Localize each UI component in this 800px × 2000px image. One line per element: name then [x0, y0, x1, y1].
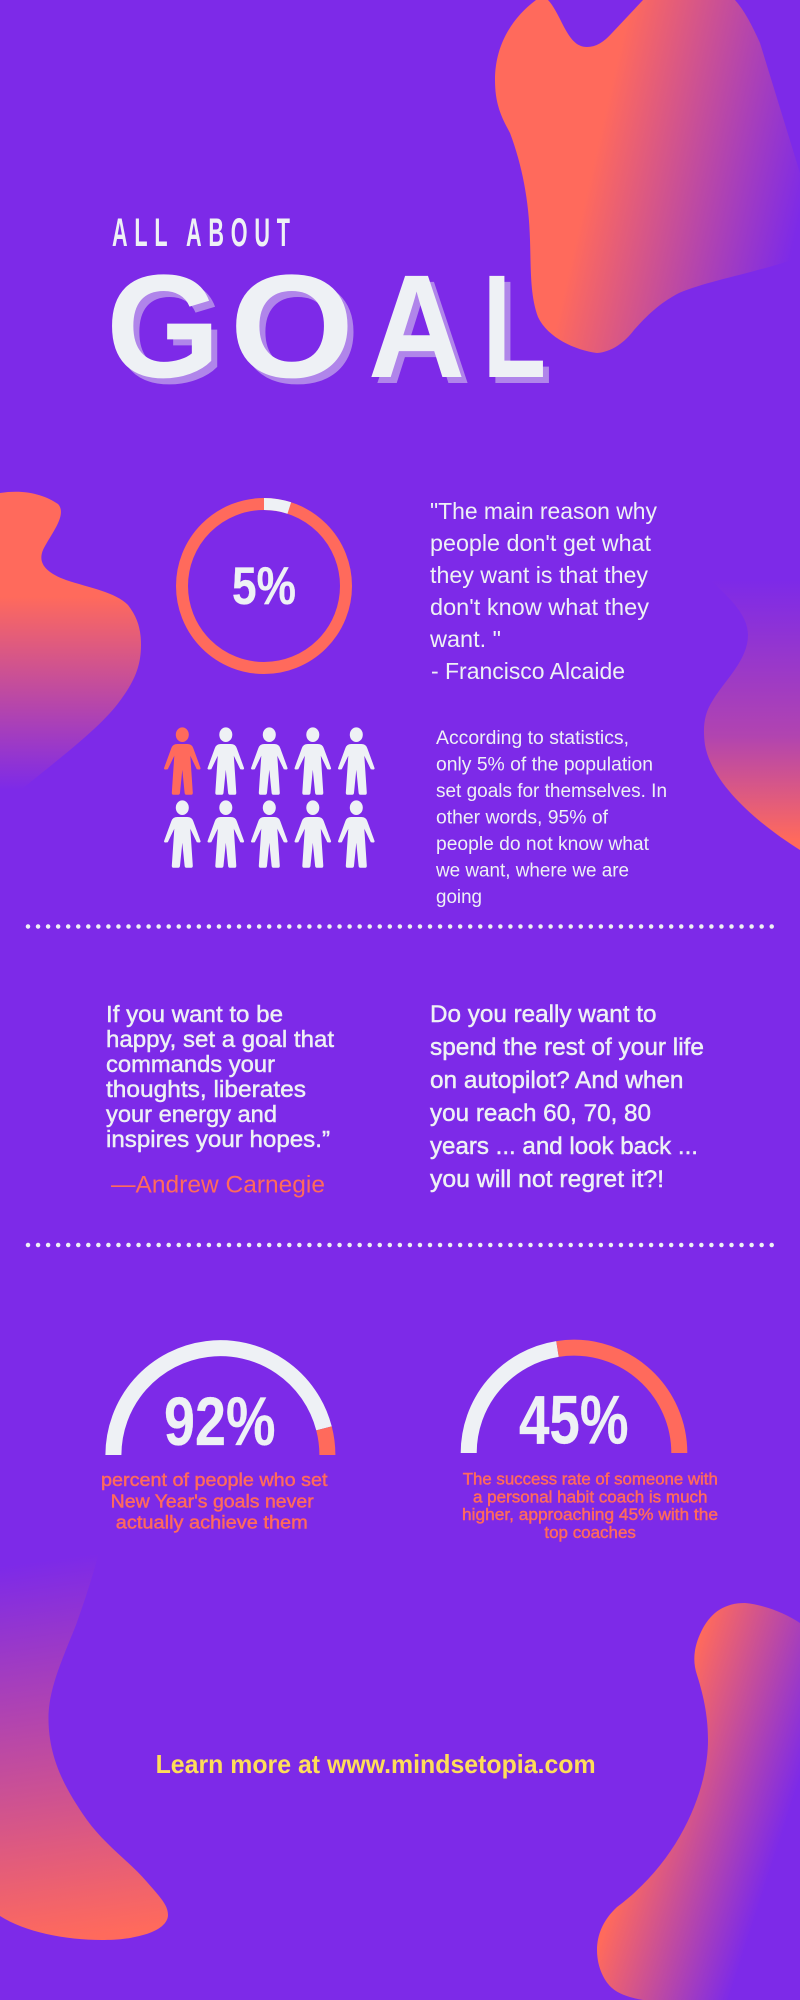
quote: Francisco Alcaide: - Francisco Alcaide: [431, 658, 625, 684]
title: all about: ALL ABOUT: [112, 210, 297, 255]
caption: 45%: top coaches: [544, 1524, 636, 1542]
caption: 45%: [462, 1470, 718, 1542]
caption: 45%: The success rate of someone with: [463, 1470, 718, 1488]
quote: Francisco Alcaide: want. ": [429, 626, 501, 652]
icon: highlighted person: [164, 727, 201, 795]
title: goal: A: [368, 243, 465, 408]
title: goal: O: [230, 244, 354, 409]
quote text: [106, 1001, 335, 1152]
title: goal shadow: [112, 249, 552, 415]
gauge value: 45%: [519, 1382, 628, 1458]
caption: 92%: [101, 1469, 328, 1532]
text: statistics: only 5% of the population: [436, 754, 653, 776]
quote text: If you want to be: [106, 1001, 283, 1027]
title: [106, 210, 552, 415]
quote text: happy, set a goal that: [106, 1026, 335, 1052]
text: autopilot question: years ... and look back ...: [430, 1133, 698, 1160]
quote text: inspires your hopes.”: [106, 1126, 330, 1152]
title: goal: [106, 243, 546, 409]
caption: 92%: actually achieve them: [116, 1511, 308, 1532]
text: statistics: people do not know what: [436, 834, 650, 855]
text: statistics: [435, 728, 667, 908]
title: goal: G: [106, 245, 220, 409]
title: goal: L: [482, 246, 546, 409]
caption: 45%: higher, approaching 45% with the: [462, 1506, 718, 1524]
quote attribution: —Andrew Carnegie: [111, 1172, 325, 1198]
quote text: commands your: [106, 1051, 275, 1077]
quote text: thoughts, liberates: [106, 1076, 306, 1102]
caption: 92%: New Year's goals never: [111, 1490, 314, 1511]
title: goal shadow: L: [488, 252, 552, 415]
icon: people pictogram 1 of 10 highlighted: [164, 727, 375, 868]
footer call to action: Learn more at www.mindsetopia.com: [156, 1749, 596, 1779]
blob: bottom right: [597, 1603, 800, 2000]
quote: Andrew Carnegie: [106, 1001, 335, 1198]
blob: bottom left: [0, 1530, 168, 1940]
quote: Francisco Alcaide: people don't get what: [430, 530, 651, 556]
text: autopilot question: you will not regret it?!: [430, 1166, 664, 1193]
text: autopilot question: spend the rest of your life: [430, 1034, 704, 1061]
quote: Francisco Alcaide: don't know what they: [430, 594, 649, 620]
text: statistics: According to statistics,: [436, 728, 629, 749]
donut value: 5%: [232, 557, 296, 616]
blob: middle right: [688, 480, 800, 850]
quote text: your energy and: [106, 1101, 277, 1127]
title: goal shadow: G: [112, 251, 226, 415]
title: goal shadow: O: [236, 250, 360, 415]
blob: top right: [495, 0, 800, 353]
chart: 92% gauge: [113, 1348, 327, 1460]
quote: Francisco Alcaide: they want is that they: [430, 562, 648, 588]
blob: middle left: [0, 492, 141, 807]
chart: 5% donut: [182, 504, 346, 668]
text: autopilot question: you reach 60, 70, 80: [430, 1100, 651, 1127]
caption: 45%: a personal habit coach is much: [473, 1488, 708, 1506]
text: statistics: going: [436, 887, 482, 908]
chart: 45% gauge: [469, 1348, 679, 1458]
text: statistics: set goals for themselves. In: [436, 781, 667, 802]
text: statistics: we want, where we are: [435, 860, 629, 882]
text: autopilot question: [430, 1001, 704, 1193]
text: autopilot question: Do you really want to: [430, 1001, 656, 1028]
text: autopilot question: on autopilot? And when: [430, 1067, 684, 1094]
gauge value: 92%: [164, 1383, 276, 1460]
title: goal shadow: A: [374, 249, 471, 414]
quote: Francisco Alcaide: [429, 498, 657, 684]
quote: Francisco Alcaide: "The main reason why: [430, 498, 657, 524]
caption: 92%: percent of people who set: [101, 1469, 328, 1490]
text: statistics: other words, 95% of: [436, 808, 609, 828]
